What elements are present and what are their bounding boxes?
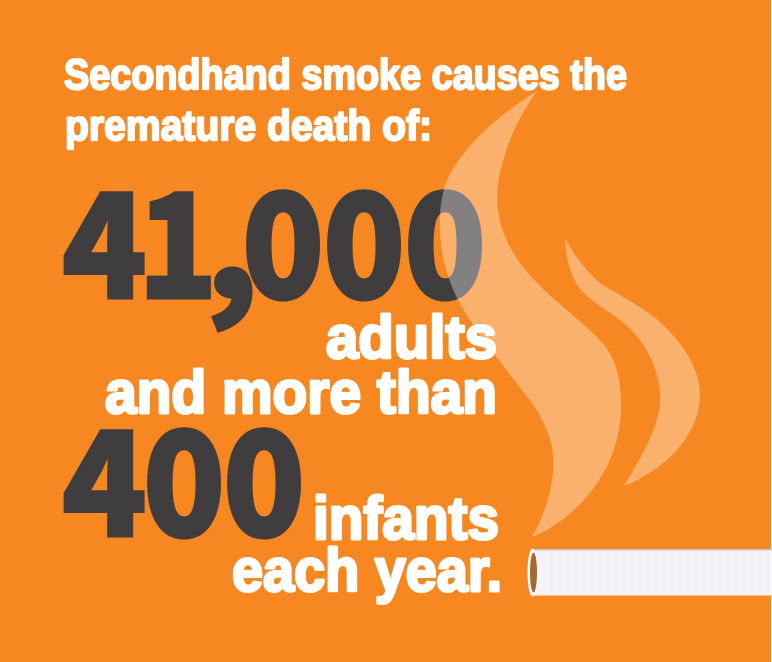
statistic: 41,000: 0 [404, 131, 486, 340]
label: infants: infants [313, 485, 499, 552]
statistic: 400: 4 [62, 368, 147, 578]
cigarette open end [528, 548, 538, 596]
title: Secondhand smoke causes the [64, 51, 627, 99]
label: each year.: each year. [232, 537, 502, 604]
statistic: 400 [62, 368, 305, 578]
statistic: 41,000: 1 [138, 130, 217, 340]
title [64, 51, 627, 150]
statistic: 400: 0 [143, 369, 225, 578]
statistic: 41,000 [62, 130, 486, 340]
label: and more than: and more than [105, 359, 497, 426]
statistic: 41,000: 0 [323, 131, 405, 340]
smoke wisp: large [440, 91, 621, 537]
label: adults: adults [326, 304, 497, 371]
icon: cigarette [528, 548, 772, 596]
icon: smoke wisps [440, 91, 700, 537]
title: premature death of: [65, 102, 432, 150]
statistic: 41,000: , [205, 130, 258, 340]
statistic: 41,000: 4 [62, 130, 147, 340]
smoke wisp: small [565, 238, 700, 486]
statistic: 41,000: 0 [242, 131, 324, 340]
cigarette body [532, 549, 772, 596]
statistic: 400: 0 [223, 369, 305, 578]
